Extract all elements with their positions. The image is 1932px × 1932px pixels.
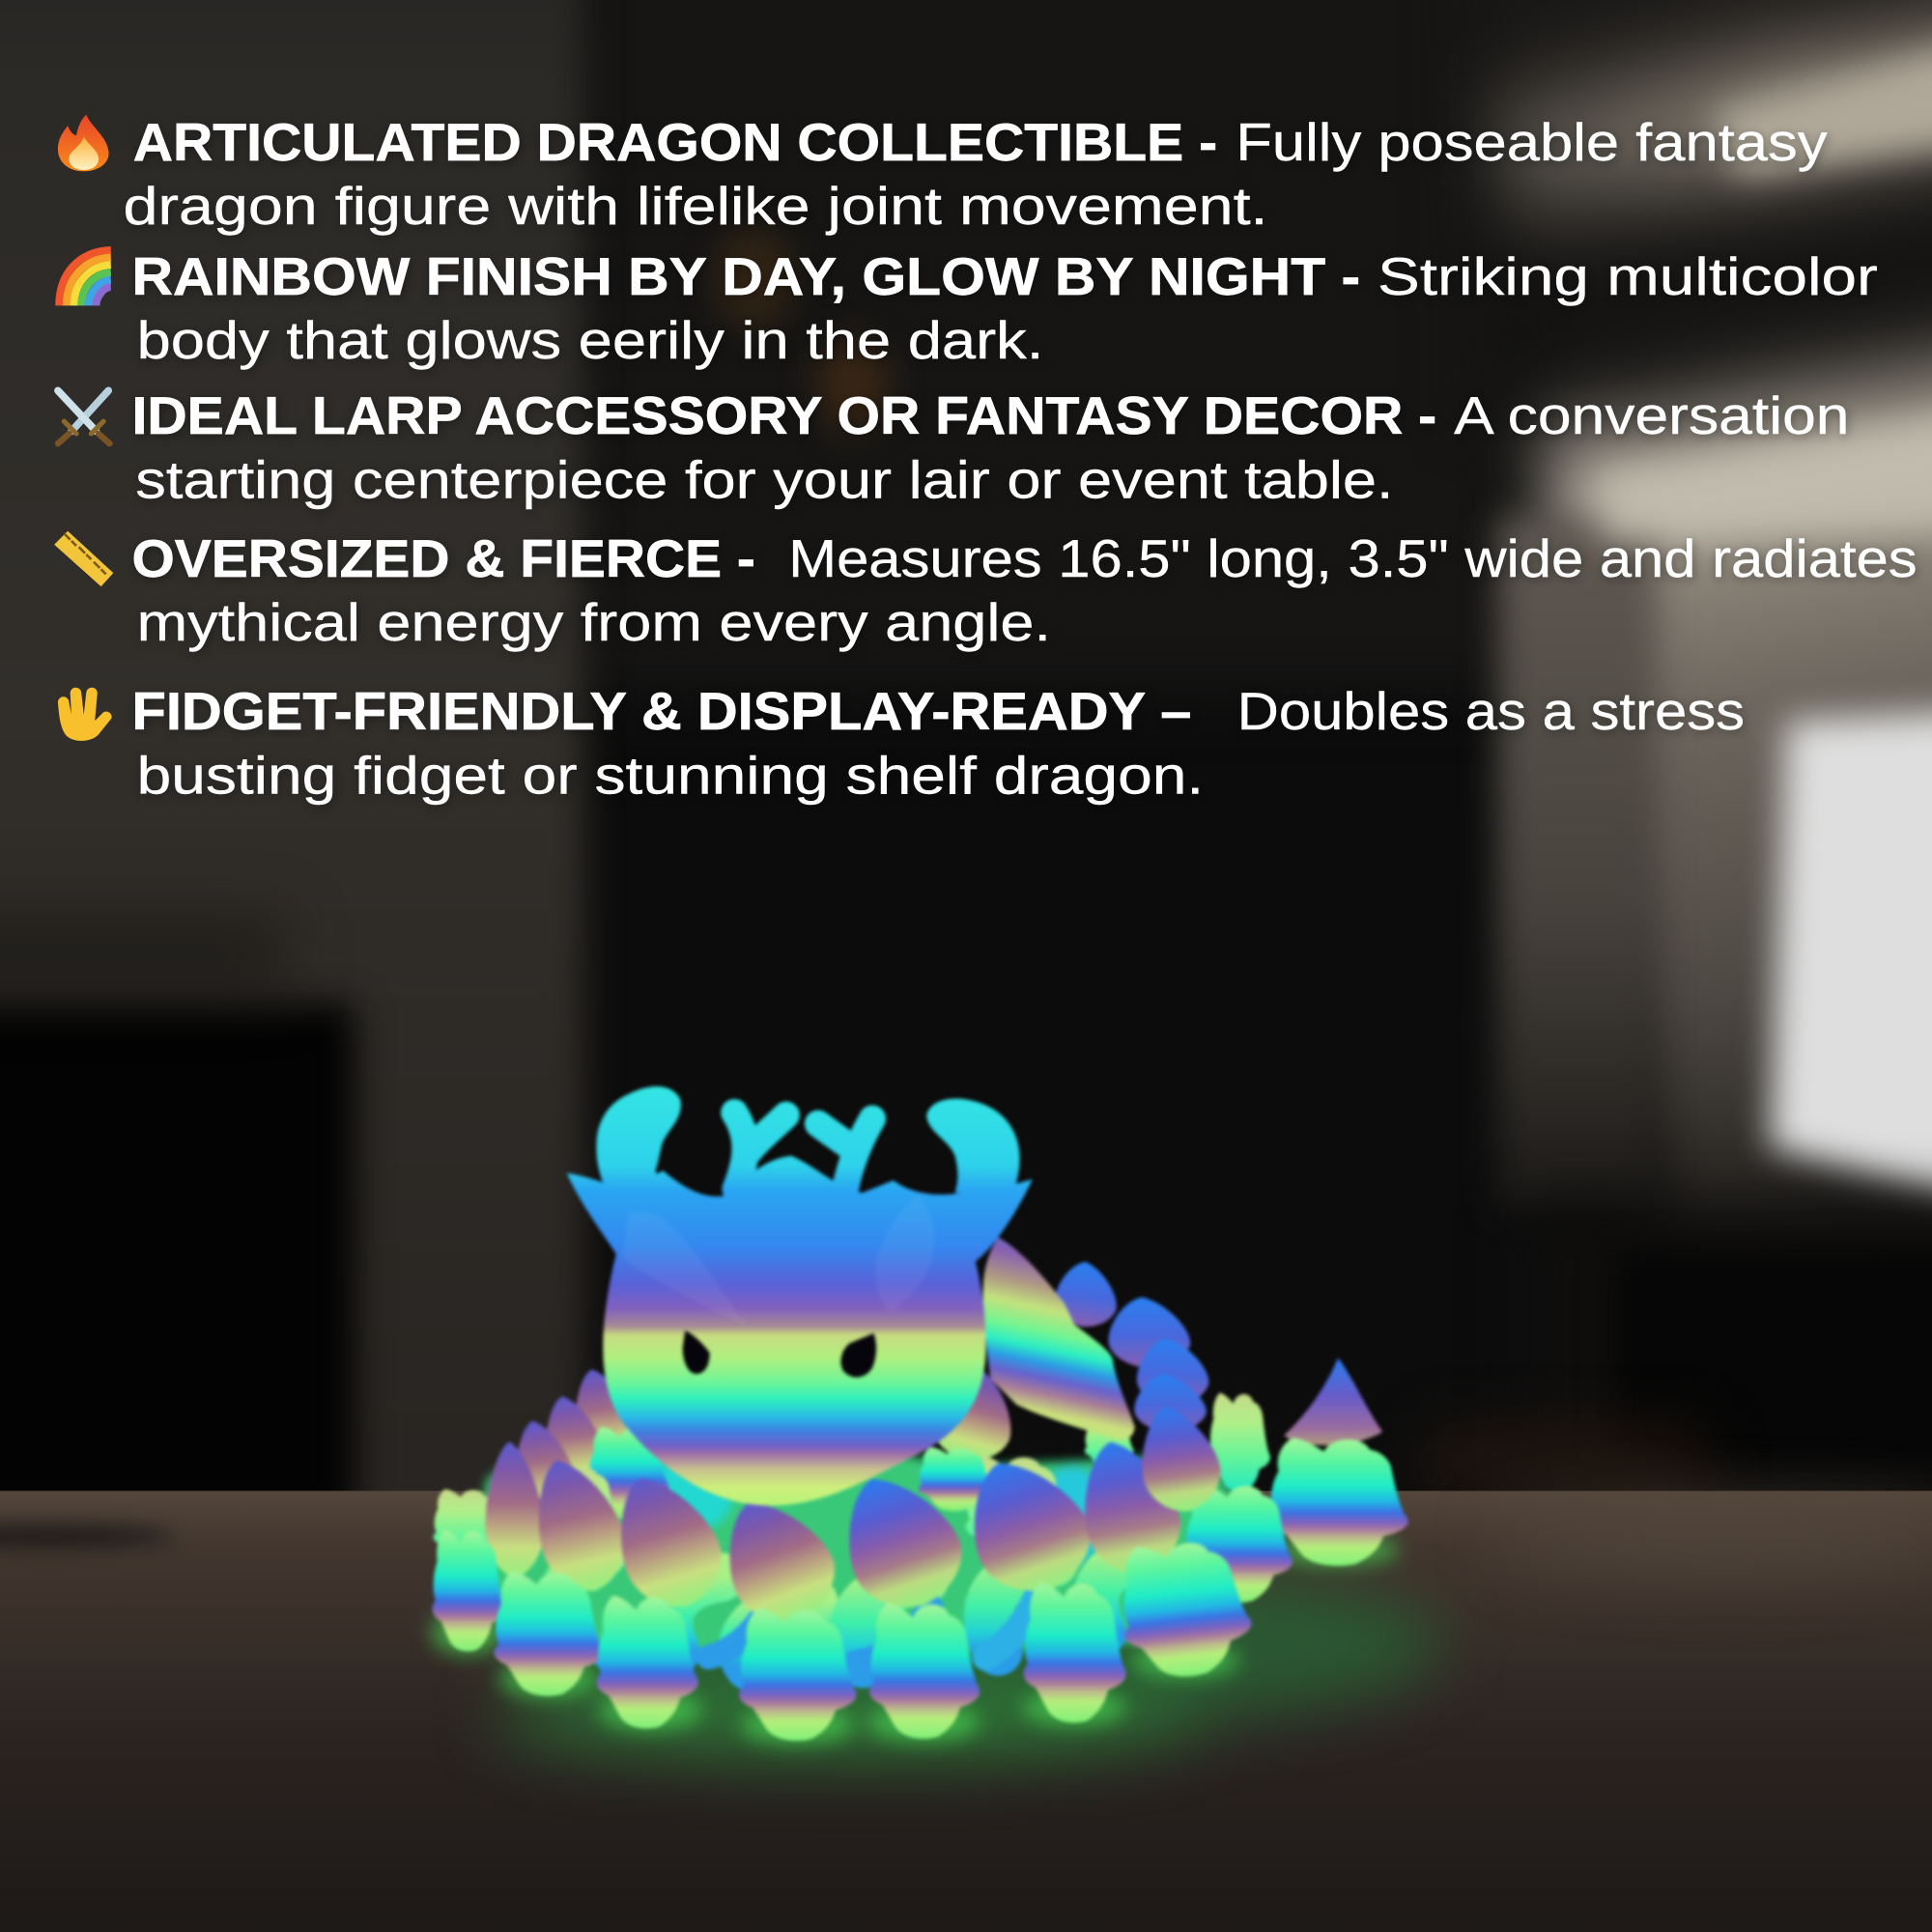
dragon: interlocking links [562, 1555, 1146, 1665]
feature 3: LARP accessory: starting centerpiece for your lair or event table. [135, 449, 1394, 509]
icon: fire [58, 115, 109, 171]
head body [603, 1244, 985, 1506]
feature 4: oversized and fierce: OVERSIZED & FIERCE - [131, 528, 755, 588]
dragon figure [433, 1087, 1408, 1741]
glow on table [431, 1535, 1441, 1761]
dragon: tail and rear feet [1185, 1358, 1408, 1603]
dragon: head [567, 1087, 1033, 1506]
dragon: green body mass behind segments [469, 1392, 1269, 1663]
feature 1: articulated dragon collectible: Fully poseable fantasy [1236, 112, 1828, 172]
feature 2: rainbow finish: Striking multicolor [1378, 246, 1878, 306]
icon: rainbow [59, 250, 111, 305]
crown scale overlay [622, 1195, 935, 1324]
crown [567, 1155, 1033, 1328]
feature 4: oversized and fierce: mythical energy from every angle. [137, 592, 1051, 652]
dragon: back spikes [923, 1259, 1208, 1470]
dragon: front spikes [524, 1401, 1226, 1636]
feature 5: fidget-friendly: Doubles as a stress [1237, 681, 1745, 741]
feature 5: fidget-friendly [131, 681, 1745, 805]
feature list text [124, 112, 1918, 805]
icon: raised hand [58, 688, 112, 741]
feature 5: fidget-friendly: FIDGET-FRIENDLY & DISPLAY-READY – [131, 681, 1191, 741]
icon: ruler [54, 531, 113, 586]
feature 4: oversized and fierce: Measures 16.5" long, 3.5" wide and radiates [788, 528, 1918, 588]
feature 2: rainbow finish: RAINBOW FINISH BY DAY, GLOW BY NIGHT - [131, 246, 1360, 306]
eye: left [683, 1331, 710, 1374]
feature 2: rainbow finish [131, 246, 1878, 370]
dragon: lumps behind head right side [919, 1414, 1134, 1565]
horn: far left [596, 1087, 681, 1202]
feature 3: LARP accessory: IDEAL LARP ACCESSORY OR FANTASY DECOR - [131, 385, 1436, 445]
feature 2: rainbow finish: body that glows eerily in the dark. [137, 310, 1043, 370]
feature 1: articulated dragon collectible: dragon figure with lifelike joint movement. [124, 176, 1267, 236]
feature 5: fidget-friendly: busting fidget or stunning shelf dragon. [137, 745, 1204, 805]
feature 1: articulated dragon collectible: ARTICULATED DRAGON COLLECTIBLE - [133, 112, 1217, 172]
horn: far right [926, 1098, 1020, 1193]
feature 3: LARP accessory [131, 385, 1850, 509]
feature 1: articulated dragon collectible [124, 112, 1828, 236]
dragon: striped back plate [983, 1237, 1135, 1440]
dragon: front feet [494, 1535, 1256, 1741]
dragon: left body segments [433, 1365, 668, 1651]
feature 4: oversized and fierce [131, 528, 1918, 652]
icon: crossed swords [58, 390, 110, 443]
eye: right [840, 1333, 876, 1378]
antlers: middle pair [734, 1113, 872, 1189]
feature 3: LARP accessory: A conversation [1454, 385, 1850, 445]
